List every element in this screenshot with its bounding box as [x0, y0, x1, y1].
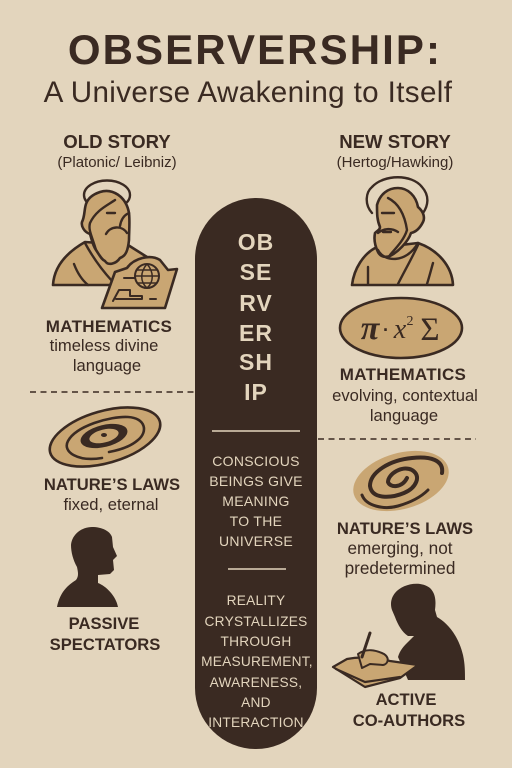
title: OBSERVERSHIP:	[68, 26, 442, 73]
text: reality crystallizes: REALITY	[227, 593, 285, 608]
icon: active co-author writing	[333, 584, 465, 687]
heading: mathematics old: language	[73, 356, 141, 375]
heading: old story: OLD STORY	[63, 131, 171, 152]
text: conscious beings: UNIVERSE	[219, 533, 293, 549]
text: reality crystallizes: AND	[241, 695, 271, 710]
heading: new story: NEW STORY	[339, 131, 451, 152]
icon: emerging spiral galaxy	[346, 441, 456, 521]
icon: math symbols oval: π	[361, 310, 381, 347]
heading: mathematics new: MATHEMATICS	[340, 365, 466, 384]
heading: active co-authors	[353, 690, 465, 730]
vertical word: OB	[238, 229, 274, 255]
vertical word: IP	[244, 379, 268, 405]
text: conscious beings	[209, 453, 303, 549]
text: reality crystallizes: AWARENESS,	[210, 675, 302, 690]
icon: math symbols oval: 2	[406, 314, 414, 329]
icon: math symbols oval: ·	[383, 320, 389, 340]
heading: nature's laws new: emerging, not	[347, 538, 453, 558]
text: conscious beings: TO THE	[230, 513, 282, 529]
text: reality crystallizes: THROUGH	[221, 634, 291, 649]
heading: active co-authors: CO-AUTHORS	[353, 711, 465, 730]
heading: nature's laws old: fixed, eternal	[63, 495, 159, 514]
heading: passive spectators: PASSIVE	[69, 614, 139, 633]
heading: nature's laws new	[337, 519, 473, 578]
heading: mathematics new	[332, 365, 478, 425]
text: conscious beings: MEANING	[222, 493, 290, 509]
title	[44, 26, 453, 109]
heading: old story: (Platonic/ Leibniz)	[57, 154, 177, 171]
text: reality crystallizes	[201, 593, 313, 730]
panel: central pill	[195, 198, 317, 749]
icon: math symbols oval: x	[393, 314, 407, 345]
heading: nature's laws new: predetermined	[345, 558, 455, 578]
text: reality crystallizes: INTERACTION	[208, 715, 304, 730]
heading: mathematics new: evolving, contextual	[332, 386, 478, 405]
vertical word: RV	[239, 290, 273, 316]
heading: old story	[57, 131, 177, 171]
divider: right dashed	[318, 438, 476, 440]
text: reality crystallizes: CRYSTALLIZES	[205, 614, 307, 629]
text: reality crystallizes: MEASUREMENT,	[201, 654, 313, 669]
divider: left dashed	[30, 391, 196, 393]
icon: old story philosopher with map	[53, 180, 177, 308]
title: A Universe Awakening to Itself	[44, 76, 453, 109]
icon: math symbols oval	[340, 298, 462, 358]
heading: new story	[337, 131, 453, 171]
heading: nature's laws old: NATURE’S LAWS	[44, 475, 180, 494]
vertical word: ER	[239, 320, 273, 346]
heading: mathematics new: language	[370, 406, 438, 425]
heading: passive spectators: SPECTATORS	[50, 635, 160, 654]
icon: math symbols oval: Σ	[420, 312, 440, 348]
heading: mathematics old	[46, 317, 172, 375]
heading: new story: (Hertog/Hawking)	[337, 154, 453, 171]
vertical word	[238, 229, 274, 405]
vertical word: SE	[240, 259, 272, 285]
heading: nature's laws old	[44, 475, 180, 514]
icon: new story philosopher with halo	[352, 177, 453, 285]
text: conscious beings: BEINGS GIVE	[209, 473, 303, 489]
icon: passive spectator silhouette	[57, 527, 118, 607]
vertical word: SH	[239, 349, 273, 375]
heading: nature's laws new: NATURE’S LAWS	[337, 519, 473, 538]
text: conscious beings: CONSCIOUS	[212, 453, 300, 469]
heading: mathematics old: MATHEMATICS	[46, 317, 172, 336]
icon: fixed orbit galaxy	[43, 396, 167, 478]
heading: active co-authors: ACTIVE	[376, 690, 436, 709]
heading: mathematics old: timeless divine	[50, 336, 158, 355]
heading: passive spectators	[50, 614, 160, 654]
